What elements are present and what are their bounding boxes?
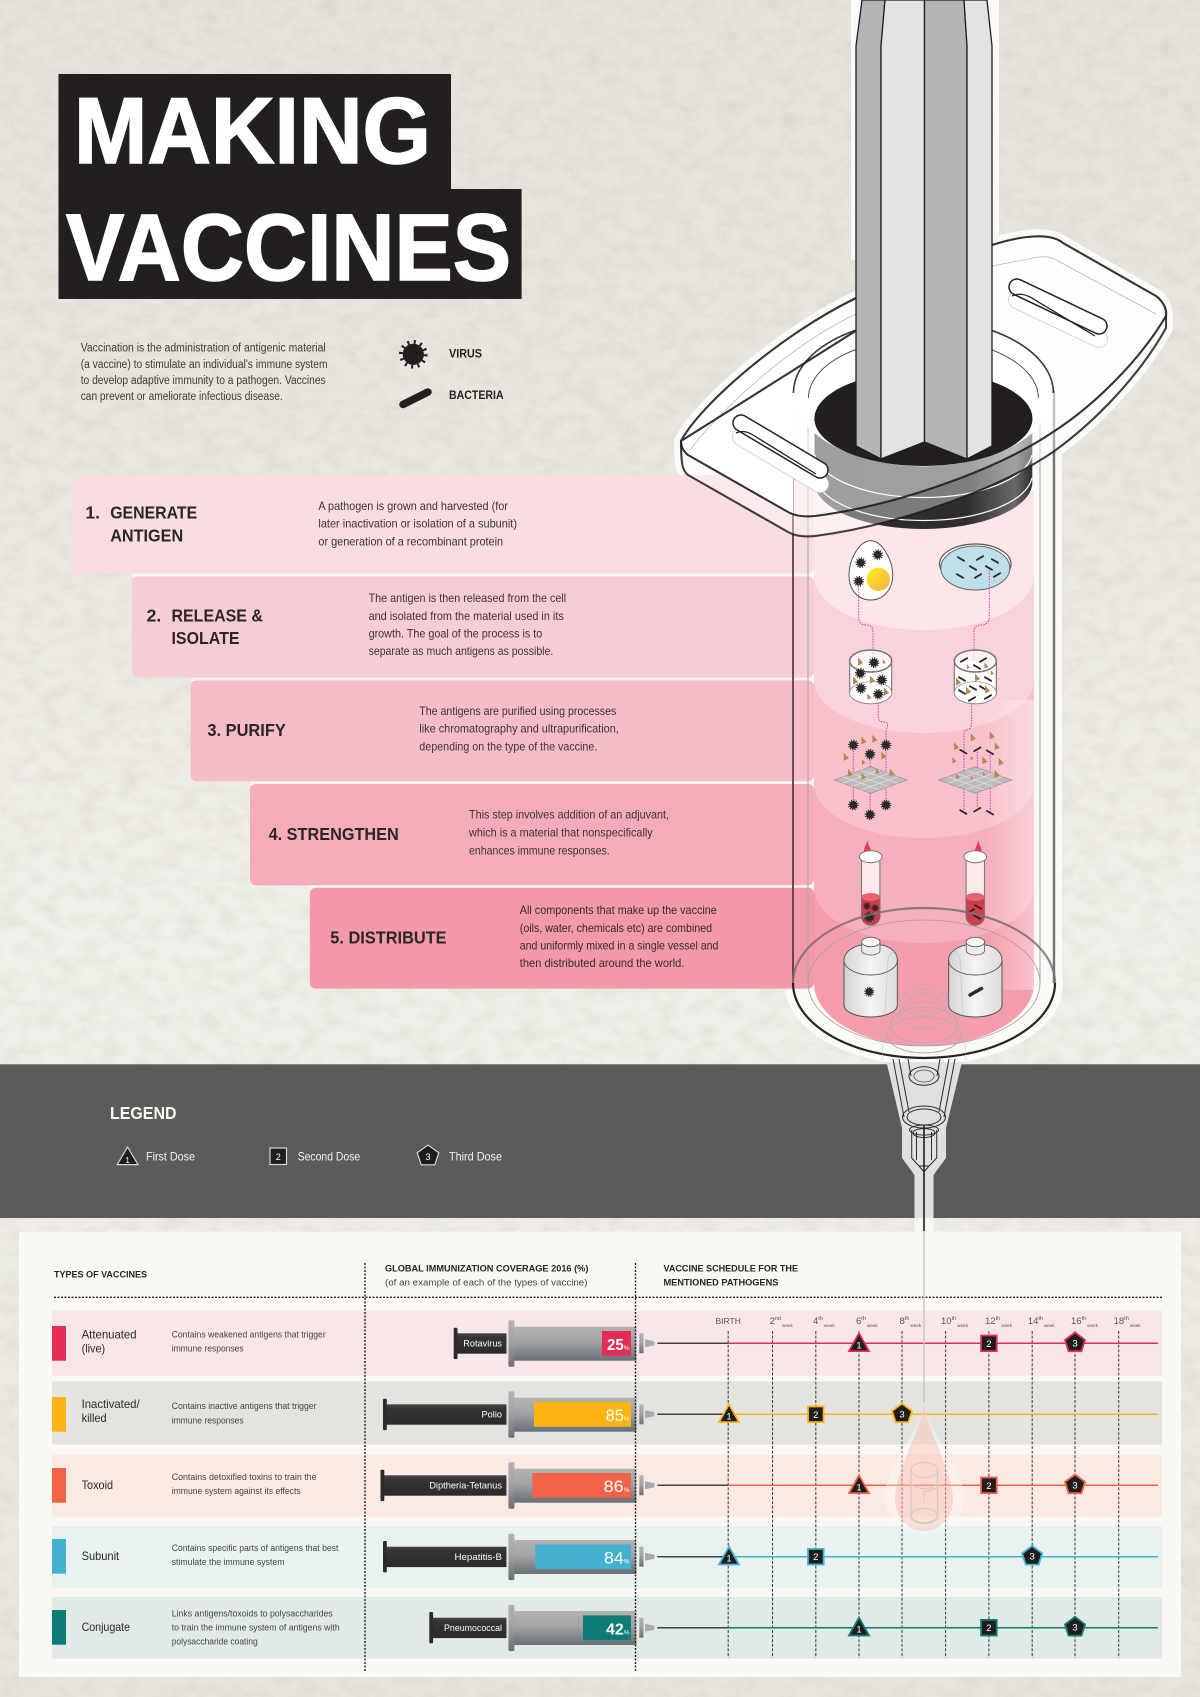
title block: VACCINES xyxy=(66,195,511,301)
inner flange contour xyxy=(690,257,1156,450)
legend: first dose: 1 xyxy=(125,1156,130,1165)
dose markers: inactivated xyxy=(719,1404,912,1422)
bacteria label: BACTERIA xyxy=(449,388,504,402)
table headers xyxy=(54,1264,799,1289)
row: toxoid: Contains detoxified toxins to train the xyxy=(172,1472,316,1483)
week axis labels: week xyxy=(957,1323,969,1328)
row: attenuated: Contains weakened antigens that trigger xyxy=(172,1330,326,1341)
dose markers: attenuated: 3 xyxy=(1072,1338,1078,1349)
week axis labels: BIRTH xyxy=(716,1316,741,1326)
row: conjugate: to train the immune system of antigens with xyxy=(172,1623,340,1634)
week axis labels: 6 xyxy=(856,1316,861,1327)
dose markers: subunit: 2 xyxy=(813,1552,818,1563)
syringe bar: diptheria-tetanus 86%: Diptheria-Tetanus xyxy=(429,1481,502,1492)
slot: left xyxy=(736,423,820,484)
syringe bar: rotavirus 25% xyxy=(454,1320,654,1367)
intro text xyxy=(81,343,328,403)
week axis labels: 16 xyxy=(1071,1316,1082,1327)
step 1 panel xyxy=(72,475,814,574)
table headers: GLOBAL IMMUNIZATION COVERAGE 2016 (%) xyxy=(385,1264,588,1275)
icon: bacteria test tube xyxy=(964,840,987,925)
week axis labels: th xyxy=(905,1316,909,1322)
step 5 panel: and uniformly mixed in a single vessel and xyxy=(520,938,718,952)
flange outlines xyxy=(681,236,1166,536)
table headers: MENTIONED PATHOGENS xyxy=(664,1278,779,1289)
week axis labels: week xyxy=(1001,1323,1013,1328)
dose markers: toxoid xyxy=(849,1474,1085,1493)
stage 3 icons xyxy=(834,732,1012,819)
step 2 panel: ISOLATE xyxy=(172,628,240,648)
step 3 panel xyxy=(191,680,814,781)
dose markers: attenuated xyxy=(849,1332,1085,1351)
row: inactivated xyxy=(52,1397,316,1432)
syringe bar: rotavirus 25%: Rotavirus xyxy=(463,1339,502,1350)
legend: first dose: First Dose xyxy=(146,1150,195,1164)
row: inactivated: Inactivated/ xyxy=(82,1397,140,1411)
week axis labels: 14 xyxy=(1028,1316,1038,1327)
syringe bar: pneumococcal 42%: % xyxy=(624,1629,630,1636)
title block: MAKING xyxy=(74,78,431,183)
step 3 panel: 3. PURIFY xyxy=(207,720,286,740)
table rows xyxy=(52,1311,1162,1659)
slot: right xyxy=(1012,287,1099,339)
step 2 panel: growth. The goal of the process is to xyxy=(369,627,543,641)
step 4 panel: enhances immune responses. xyxy=(469,843,610,857)
step 1 panel: GENERATE xyxy=(110,502,197,522)
barrel mouth xyxy=(793,320,1053,466)
week axis labels: week xyxy=(867,1323,878,1328)
table headers: VACCINE SCHEDULE FOR THE xyxy=(664,1264,799,1275)
row: inactivated: Contains inactive antigens that trigger xyxy=(172,1401,316,1412)
icon: virus bottle xyxy=(844,937,897,1017)
icon: petri dish xyxy=(940,544,1011,590)
dose markers: toxoid: 1 xyxy=(856,1482,862,1492)
step 3 panel: like chromatography and ultrapurification, xyxy=(419,722,619,736)
legend: second dose xyxy=(270,1148,360,1164)
week axis labels: th xyxy=(861,1316,866,1322)
table panel xyxy=(19,1232,1181,1677)
step 3 panel: depending on the type of the vaccine. xyxy=(419,740,597,754)
syringe bar: hepatitis-b 84%: % xyxy=(624,1558,630,1565)
syringe bar: polio 85%: % xyxy=(624,1416,630,1423)
row: attenuated xyxy=(52,1326,326,1361)
row: attenuated: Attenuated xyxy=(82,1328,137,1342)
icon: bacteria filter xyxy=(939,732,1012,816)
virus label: VIRUS xyxy=(449,346,482,360)
syringe bar: diptheria-tetanus 86%: % xyxy=(624,1487,630,1494)
step 2 panel: separate as much antigens as possible. xyxy=(369,644,553,658)
dose markers: subunit: 3 xyxy=(1030,1552,1035,1563)
step 2 panel: RELEASE & xyxy=(172,606,263,626)
step 4 panel: 4. STRENGTHEN xyxy=(269,824,399,844)
week axis labels: th xyxy=(1082,1316,1086,1322)
syringe bar: rotavirus 25%: % xyxy=(624,1345,630,1352)
icon: bacteria beaker xyxy=(954,650,996,704)
dose markers: subunit: 1 xyxy=(726,1554,732,1564)
step 5 panel: (oils, water, chemicals etc) are combined xyxy=(520,921,712,935)
intro text: to develop adaptive immunity to a pathogen. Vaccines xyxy=(81,375,326,387)
row: toxoid xyxy=(52,1468,316,1503)
step 1 panel: later inactivation or isolation of a subunit) xyxy=(318,516,517,530)
legend heading: LEGEND xyxy=(110,1103,176,1123)
syringe bar: diptheria-tetanus 86% xyxy=(380,1462,654,1509)
dose markers: conjugate: 3 xyxy=(1072,1623,1078,1634)
dose markers: conjugate: 1 xyxy=(856,1625,862,1635)
step 4 panel: This step involves addition of an adjuvant, xyxy=(469,808,669,822)
legend: third dose xyxy=(417,1145,502,1165)
row: inactivated: immune responses xyxy=(172,1415,244,1426)
step 2 panel: 2. xyxy=(147,606,161,626)
legend: second dose: Second Dose xyxy=(298,1150,360,1164)
legend: second dose: 2 xyxy=(276,1152,281,1162)
stage 2 icons xyxy=(850,650,996,704)
syringe bar: pneumococcal 42%: 42 xyxy=(606,1621,624,1638)
dose markers: inactivated: 3 xyxy=(899,1409,905,1420)
syringe bar: polio 85% xyxy=(383,1391,654,1438)
week axis labels: week xyxy=(782,1323,793,1328)
row: toxoid: immune system against its effects xyxy=(172,1486,301,1497)
step 5 panel: 5. DISTRIBUTE xyxy=(330,928,447,948)
row: inactivated: killed xyxy=(82,1411,107,1425)
week axis labels: 8 xyxy=(900,1316,905,1327)
syringe bar: polio 85%: Polio xyxy=(482,1410,502,1421)
intro text: Vaccination is the administration of antigenic material xyxy=(81,343,326,355)
icon: bacteria bottle xyxy=(949,937,1002,1017)
step 5 panel: then distributed around the world. xyxy=(520,956,684,970)
step 2 panel: The antigen is then released from the cell xyxy=(369,591,566,605)
legend: third dose: 3 xyxy=(425,1152,431,1162)
legend: third dose: Third Dose xyxy=(449,1150,502,1164)
dose markers: subunit xyxy=(719,1546,1042,1565)
dose markers: inactivated: 1 xyxy=(726,1411,732,1421)
step 4 panel xyxy=(250,784,814,885)
week axis labels: 10 xyxy=(941,1316,952,1327)
stage 4 icons xyxy=(859,840,987,925)
dose markers: conjugate xyxy=(849,1617,1085,1636)
legend band xyxy=(0,1064,1200,1218)
row: toxoid: Toxoid xyxy=(82,1478,113,1492)
syringe bar: pneumococcal 42% xyxy=(429,1605,654,1651)
week axis labels: week xyxy=(824,1323,835,1328)
week axis labels: 4 xyxy=(813,1316,818,1327)
pathogen key xyxy=(401,342,504,404)
schedule lines xyxy=(657,1343,1158,1628)
needle drip and drop xyxy=(884,1231,964,1535)
row: subunit: Subunit xyxy=(82,1549,120,1563)
stage 5 icons xyxy=(844,937,1002,1017)
icon: virus xyxy=(401,342,426,366)
icon: egg xyxy=(849,541,893,600)
row: conjugate: Conjugate xyxy=(82,1620,130,1634)
syringe barrel outline xyxy=(793,390,1055,1060)
dose markers: inactivated: 2 xyxy=(813,1410,818,1421)
syringe barrel liquid tiers xyxy=(814,490,1034,1046)
row: subunit xyxy=(52,1539,339,1574)
dose markers: attenuated: 2 xyxy=(986,1339,992,1350)
syringe bar: hepatitis-b 84%: 84 xyxy=(604,1548,624,1567)
intro text: can prevent or ameliorate infectious disease. xyxy=(81,391,283,403)
row: conjugate: polysaccharide coating xyxy=(172,1637,258,1648)
row: subunit: Contains specific parts of antigens that best xyxy=(172,1543,339,1554)
syringe white halo xyxy=(681,0,1166,1065)
plunger gasket xyxy=(814,418,1032,529)
table headers: TYPES OF VACCINES xyxy=(54,1270,148,1281)
week axis labels: 18 xyxy=(1114,1316,1124,1327)
week axis labels: th xyxy=(996,1316,1000,1322)
week axis labels: week xyxy=(910,1323,922,1328)
dose markers: attenuated: 1 xyxy=(856,1340,862,1350)
dose markers: conjugate: 2 xyxy=(986,1623,992,1634)
step 1 panel: ANTIGEN xyxy=(110,525,183,545)
flange underside and surface xyxy=(681,236,1166,536)
week axis labels: 2 xyxy=(770,1316,775,1327)
legend: first dose xyxy=(117,1147,195,1165)
week axis labels: th xyxy=(1124,1316,1129,1322)
step 2 panel xyxy=(132,576,814,678)
syringe bar: hepatitis-b 84%: Hepatitis-B xyxy=(454,1552,502,1563)
week axis labels: week xyxy=(1044,1323,1055,1328)
step 2 panel: and isolated from the material used in its xyxy=(369,609,564,623)
syringe bar: diptheria-tetanus 86%: 86 xyxy=(604,1477,624,1496)
stage 1 icons xyxy=(849,541,1011,600)
icon: virus beaker xyxy=(850,650,892,704)
step 3 panel: The antigens are purified using processes xyxy=(419,704,616,718)
step 4 panel: which is a material that nonspecifically xyxy=(468,825,653,839)
syringe bar: hepatitis-b 84% xyxy=(383,1534,654,1580)
syringe bar: pneumococcal 42%: Pneumococcal xyxy=(444,1623,502,1634)
row: conjugate xyxy=(52,1609,340,1648)
step 5 panel: All components that make up the vaccine xyxy=(520,903,717,917)
syringe bar: rotavirus 25%: 25 xyxy=(607,1337,624,1354)
step 1 panel: 1. xyxy=(85,502,100,522)
week axis labels: th xyxy=(1038,1316,1043,1322)
step 5 panel xyxy=(310,888,814,989)
row: subunit: stimulate the immune system xyxy=(172,1557,285,1568)
icon: virus test tube xyxy=(859,840,882,925)
needle hub xyxy=(886,1059,962,1232)
step 1 panel: or generation of a recombinant protein xyxy=(318,534,503,548)
magenta process paths xyxy=(853,570,990,813)
dose markers: toxoid: 2 xyxy=(986,1481,992,1492)
icon: faint vial in drop xyxy=(911,1462,938,1524)
step 1 panel: A pathogen is grown and harvested (for xyxy=(318,499,508,513)
intro text: (a vaccine) to stimulate an individual's immune system xyxy=(81,359,328,371)
row: attenuated: (live) xyxy=(82,1342,105,1356)
plunger rod xyxy=(856,0,992,459)
week axis labels: th xyxy=(952,1316,956,1322)
title block xyxy=(58,74,522,301)
week axis labels: week xyxy=(1087,1323,1099,1328)
week axis labels: nd xyxy=(775,1316,781,1322)
week axis labels: week xyxy=(1130,1323,1141,1328)
syringe bar: polio 85%: 85 xyxy=(606,1406,624,1425)
row: attenuated: immune responses xyxy=(172,1343,244,1354)
week axis labels xyxy=(716,1316,1141,1328)
row: conjugate: Links antigens/toxoids to polysaccharides xyxy=(172,1609,333,1620)
icon: virus filter xyxy=(834,735,907,819)
icon: bacteria xyxy=(403,392,428,404)
table headers: (of an example of each of the types of vaccine) xyxy=(385,1278,588,1289)
week axis labels: 12 xyxy=(985,1316,996,1327)
week axis labels: th xyxy=(818,1316,823,1322)
dose markers: toxoid: 3 xyxy=(1072,1480,1078,1491)
